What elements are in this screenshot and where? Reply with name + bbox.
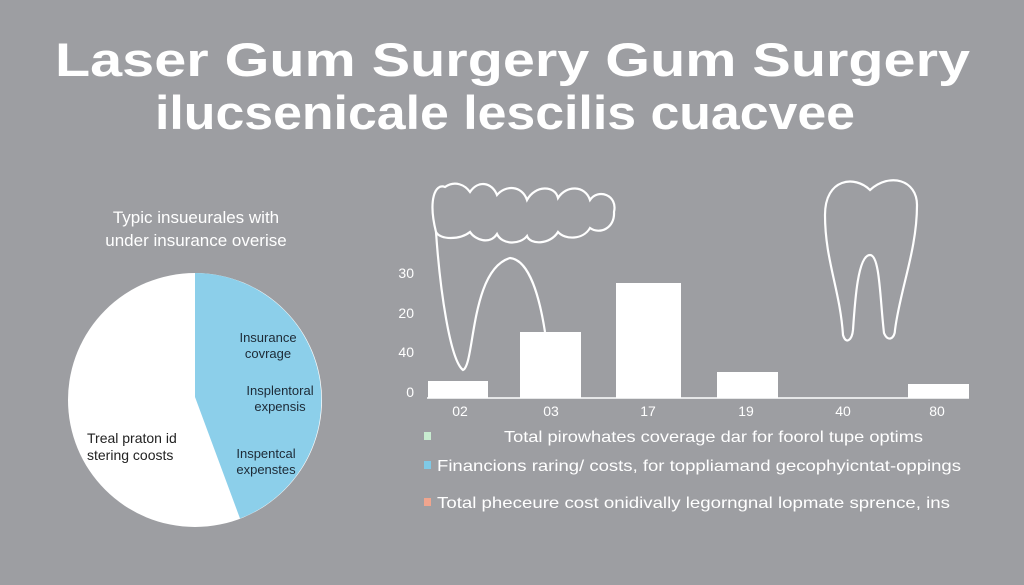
y axis labels: 20 [398,305,414,321]
pie labels: blue slice: Inspentcal [236,446,296,461]
pie labels: blue slice: Insplentoral [246,383,314,398]
bar chart [398,265,969,419]
pie label: white slice: stering coosts [87,447,173,463]
x axis labels [452,403,945,419]
x axis labels: 40 [835,403,851,419]
pie label: white slice: Treal praton id [87,430,177,446]
legend [424,429,961,512]
y axis labels: 0 [406,384,414,400]
legend: Financions raring/ costs, for toppliamand gecophyicntat-oppings [437,458,961,475]
pie subtitle [105,208,287,250]
pie labels: blue slice [236,330,314,477]
title: ilucsenicale lescilis cuacvee [155,86,855,139]
y axis labels: 40 [398,344,414,360]
title: Laser Gum Surgery Gum Surgery [55,33,970,86]
pie labels: blue slice: expenstes [236,462,296,477]
pie labels: blue slice: expensis [254,399,306,414]
x axis labels: 80 [929,403,945,419]
y axis labels [398,265,414,400]
legend: Total pirowhates coverage dar for foorol tupe optims [504,429,923,446]
x axis labels: 19 [738,403,754,419]
pie labels: blue slice: covrage [245,346,291,361]
x axis labels: 17 [640,403,656,419]
pie labels: blue slice: Insurance [239,330,297,345]
icon: single tooth outline [825,180,917,340]
pie chart [68,273,322,527]
pie subtitle: Typic insueurales with [113,208,279,227]
title [55,33,970,139]
y axis labels: 30 [398,265,414,281]
legend: Total pheceure cost onidivally legorngnal lopmate sprence, ins [437,495,950,512]
icon: teeth bridge outline [433,184,615,370]
x axis labels: 02 [452,403,468,419]
pie subtitle: under insurance overise [105,231,287,250]
x axis labels: 03 [543,403,559,419]
pie label: white slice [87,430,177,463]
